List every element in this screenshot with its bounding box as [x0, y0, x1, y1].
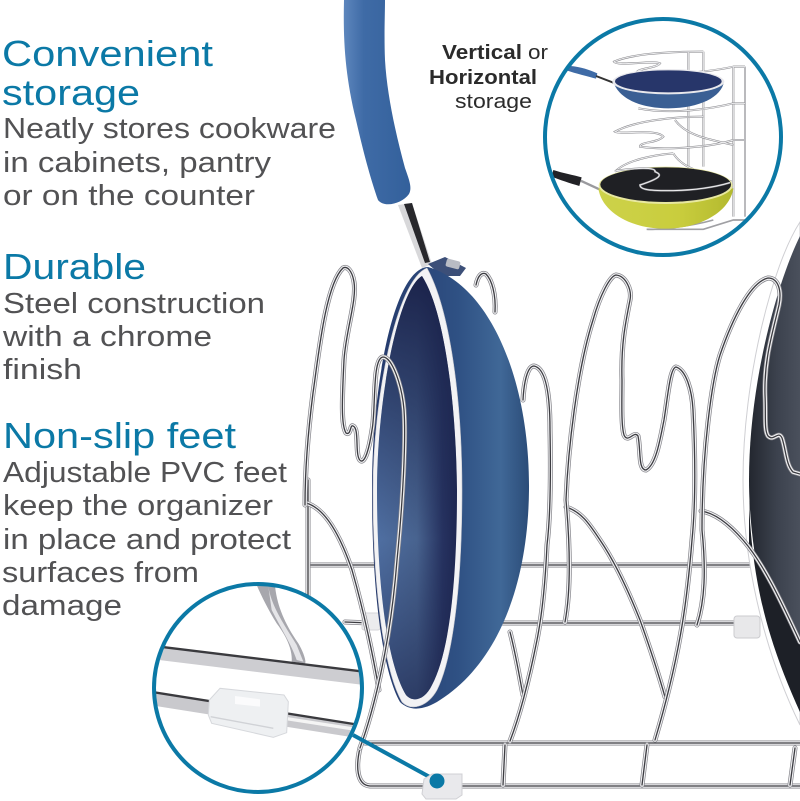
inset middle rack wire: [615, 103, 745, 182]
detail contents: [150, 585, 367, 737]
callout connector line: [353, 735, 437, 781]
body: convenient storage: Neatly stores cookware: [3, 113, 336, 145]
main blue pan: [344, 0, 529, 709]
detail circle outline: [154, 584, 362, 792]
text block: vertical or horizontal storage: or: [528, 41, 548, 64]
pan interior: [377, 276, 457, 699]
pan rivet: [428, 257, 466, 276]
text block: vertical or horizontal storage: [429, 41, 548, 113]
inset rack rear wires: [614, 52, 745, 217]
rack: rails and rear wires: [308, 273, 800, 786]
pan outer body: [372, 267, 529, 709]
body: convenient storage: in cabinets, pantry: [3, 147, 272, 179]
detail pan handle arm: [257, 585, 305, 663]
rack: front wires: [305, 268, 800, 748]
right pan, cropped: [743, 222, 800, 725]
pan handle arm: [398, 203, 432, 268]
body: convenient storage: [3, 113, 336, 212]
body: non-slip feet: Adjustable PVC feet: [3, 457, 287, 489]
text block: vertical or horizontal storage: Vertical: [442, 41, 522, 64]
heading: non-slip feet: Non-slip feet: [3, 415, 236, 456]
body: non-slip feet: keep the organizer: [3, 490, 273, 522]
foot clip under callout dot: [422, 774, 462, 799]
callout dot: [430, 774, 444, 788]
text block: vertical or horizontal storage: storage: [455, 90, 532, 113]
heading: convenient storage: Convenient: [2, 33, 213, 74]
body: non-slip feet: [2, 457, 291, 622]
body: non-slip feet: in place and protect: [3, 524, 291, 556]
body: non-slip feet: surfaces from: [2, 557, 199, 589]
text block: convenient storage: [2, 33, 336, 212]
heading: convenient storage: storage: [2, 72, 140, 113]
detail plastic foot: [208, 688, 288, 737]
inset blue pan: [567, 66, 724, 108]
body: durable: with a chrome: [2, 321, 212, 353]
text block: vertical or horizontal storage: Horizontal: [429, 66, 537, 89]
pan handle grip: [344, 0, 410, 204]
inset circle: non-slip foot detail: [150, 584, 367, 792]
inset yellow pan: [552, 167, 745, 229]
pan rim: [373, 268, 462, 707]
inset circle outline: [545, 19, 781, 255]
rack feet on rails: [362, 613, 760, 638]
heading: convenient storage: [2, 33, 213, 113]
body: non-slip feet: damage: [2, 590, 122, 622]
inset contents: [552, 52, 745, 229]
inset circle: stacked storage: [544, 18, 782, 256]
body: durable: Steel construction: [3, 288, 265, 320]
heading: durable: Durable: [3, 246, 146, 287]
detail lower tube: [150, 692, 360, 732]
detail upper tube: [157, 646, 367, 679]
body: durable: finish: [3, 354, 82, 386]
text block: durable: [2, 246, 265, 386]
body: convenient storage: or on the counter: [3, 180, 255, 212]
body: durable: [2, 288, 265, 386]
text block: non-slip feet: [2, 415, 291, 622]
